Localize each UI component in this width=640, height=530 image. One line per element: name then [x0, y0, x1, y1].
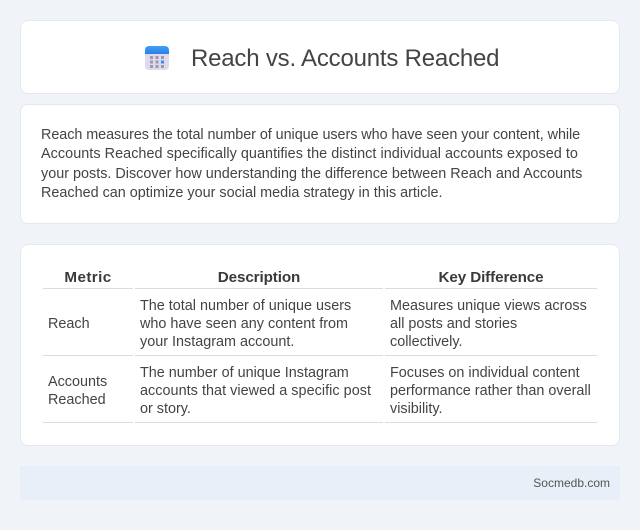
cell: Reach description: your Instagram account. — [140, 334, 294, 350]
cell: Reach key difference: Measures unique views across — [390, 298, 587, 314]
cell: Accounts Reached: Accounts — [48, 374, 107, 390]
cell: Reach key difference — [390, 298, 587, 350]
cell: Accounts Reached description — [140, 365, 371, 417]
cell: Reach description: The total number of unique users — [140, 298, 351, 314]
cell: Reach key difference: all posts and stories — [390, 316, 517, 332]
panel: title — [20, 20, 620, 94]
cell: Reach description — [140, 298, 351, 350]
cell: Accounts Reached key difference: Focuses on individual content — [390, 365, 580, 381]
cell: Reach key difference: collectively. — [390, 334, 463, 350]
intro line 1: Reach measures the total number of unique users who have seen your content, while — [41, 127, 580, 143]
cell: Accounts Reached: Reached — [48, 392, 106, 408]
icon: calendar — [145, 46, 169, 70]
header: Description: Description — [218, 269, 300, 286]
cell: Reach description: who have seen any content from — [140, 316, 348, 332]
cell: Accounts Reached key difference: performance rather than overall — [390, 383, 591, 399]
cell: Accounts Reached description: The number of unique Instagram — [140, 365, 349, 381]
cell: Accounts Reached description: accounts that viewed a specific post — [140, 383, 371, 399]
intro line 2: Accounts Reached specifically quantifies the distinct individual accounts exposed to — [41, 146, 578, 162]
intro line 3: your posts. Discover how understanding the difference between Reach and Accounts — [41, 166, 582, 182]
heading: Reach vs. Accounts Reached — [191, 45, 499, 72]
cell: Accounts Reached description: or story. — [140, 401, 191, 417]
cell: Accounts Reached — [48, 374, 107, 408]
panel: comparison table — [20, 244, 620, 446]
footer source text: Socmedb.com — [533, 476, 610, 490]
header: Key Difference: Key Difference — [439, 269, 543, 286]
cell: Accounts Reached key difference — [390, 365, 591, 417]
cell: Accounts Reached key difference: visibility. — [390, 401, 443, 417]
footer bar — [20, 466, 620, 500]
cell: Reach: Reach — [48, 316, 90, 332]
intro line 4: Reached can optimize your social media strategy in this article. — [41, 185, 443, 201]
panel: intro text — [20, 104, 620, 224]
header: Metric: Metric — [64, 269, 112, 286]
